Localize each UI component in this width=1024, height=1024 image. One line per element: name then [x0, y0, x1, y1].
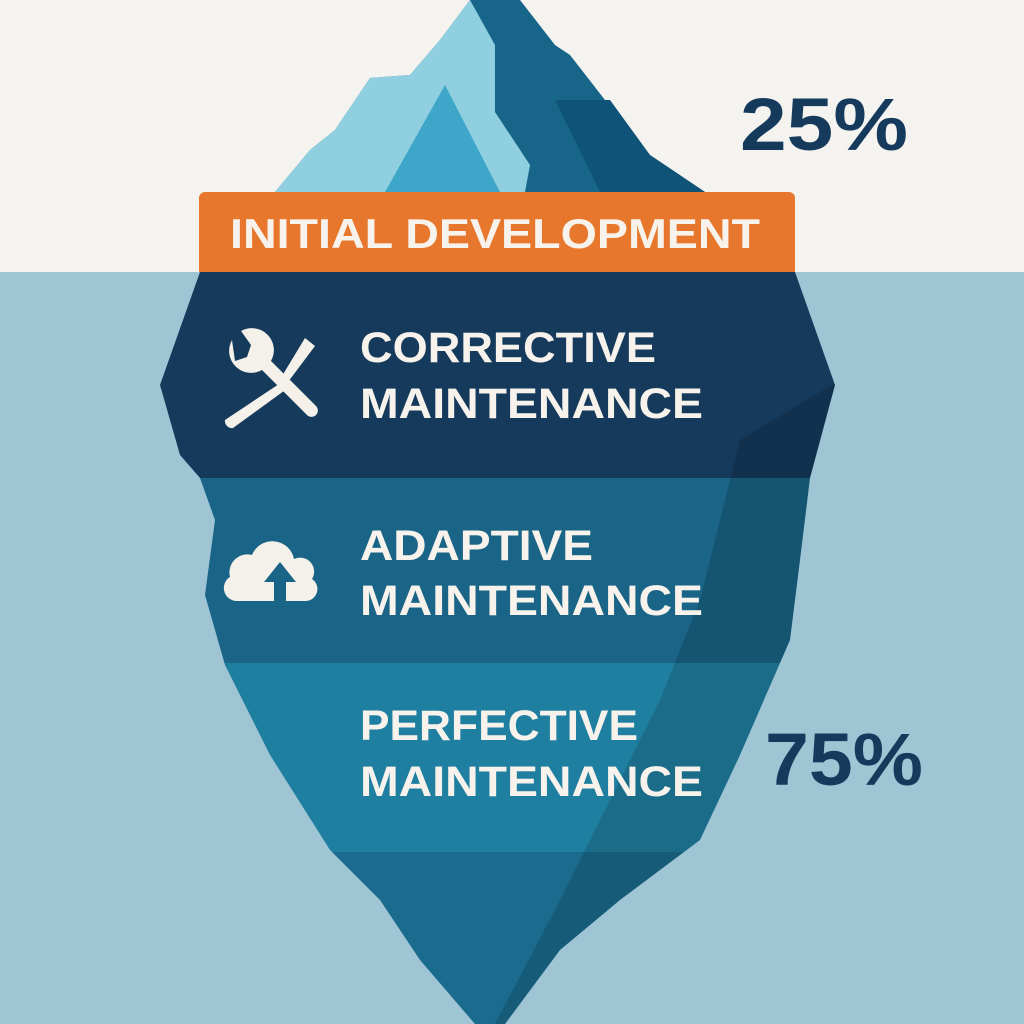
text: perfective maintenance: MAINTENANCE	[360, 758, 703, 806]
text: adaptive maintenance: MAINTENANCE	[360, 577, 703, 625]
background: sky	[0, 0, 1024, 272]
label: initial development: INITIAL DEVELOPMENT	[230, 210, 760, 257]
background: water	[0, 272, 1024, 1024]
text: corrective maintenance: CORRECTIVE	[360, 324, 656, 372]
percentage: 25%: 25%	[740, 83, 908, 166]
text: perfective maintenance: PERFECTIVE	[360, 702, 638, 750]
icon: cloud upload	[224, 541, 317, 601]
icon: wrench and screwdriver	[225, 328, 318, 428]
text: adaptive maintenance	[360, 522, 703, 625]
iceberg underwater body	[160, 272, 835, 1024]
iceberg tip	[275, 0, 705, 192]
text: perfective maintenance	[360, 702, 703, 806]
label: initial development	[199, 192, 795, 272]
text: corrective maintenance	[360, 324, 703, 428]
text: adaptive maintenance: ADAPTIVE	[360, 522, 593, 570]
text: corrective maintenance: MAINTENANCE	[360, 380, 703, 428]
percentage: 75%: 75%	[765, 718, 923, 801]
